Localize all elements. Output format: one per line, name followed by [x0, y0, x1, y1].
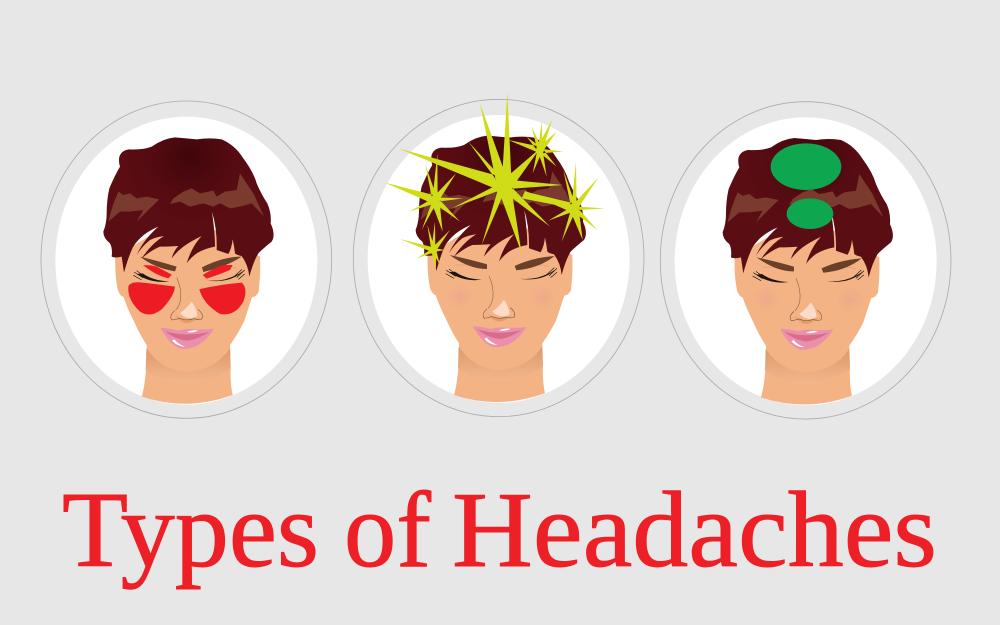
- top right star: [508, 119, 563, 177]
- panel: sinus headache portrait: [41, 101, 332, 418]
- title: of: [344, 471, 431, 590]
- lower left star: [400, 222, 450, 268]
- big star: [398, 92, 574, 253]
- title: Types: [62, 471, 319, 590]
- left star: [385, 153, 463, 232]
- title: [62, 471, 937, 590]
- white disc: [675, 117, 937, 405]
- large green pain area: [771, 143, 841, 190]
- icon: yellow pain starbursts: [385, 92, 605, 268]
- small green pain area: [787, 198, 833, 229]
- soft eyebrows and blush: [754, 257, 863, 313]
- face illustration: [723, 138, 893, 404]
- outer ring: [353, 99, 644, 417]
- panel: cluster headache portrait: [353, 99, 644, 417]
- outer ring: [41, 101, 332, 418]
- outer ring: [660, 102, 951, 419]
- angry eyebrows: [140, 257, 242, 272]
- sinus pain areas: [128, 265, 245, 315]
- face illustration: [103, 137, 274, 404]
- face illustration: [416, 136, 586, 402]
- soft eyebrows and blush: [447, 255, 556, 310]
- white disc: [55, 117, 317, 405]
- right star: [525, 162, 605, 242]
- title: Headaches: [452, 471, 937, 590]
- white disc: [368, 115, 630, 403]
- panel: tension headache portrait: [660, 102, 951, 419]
